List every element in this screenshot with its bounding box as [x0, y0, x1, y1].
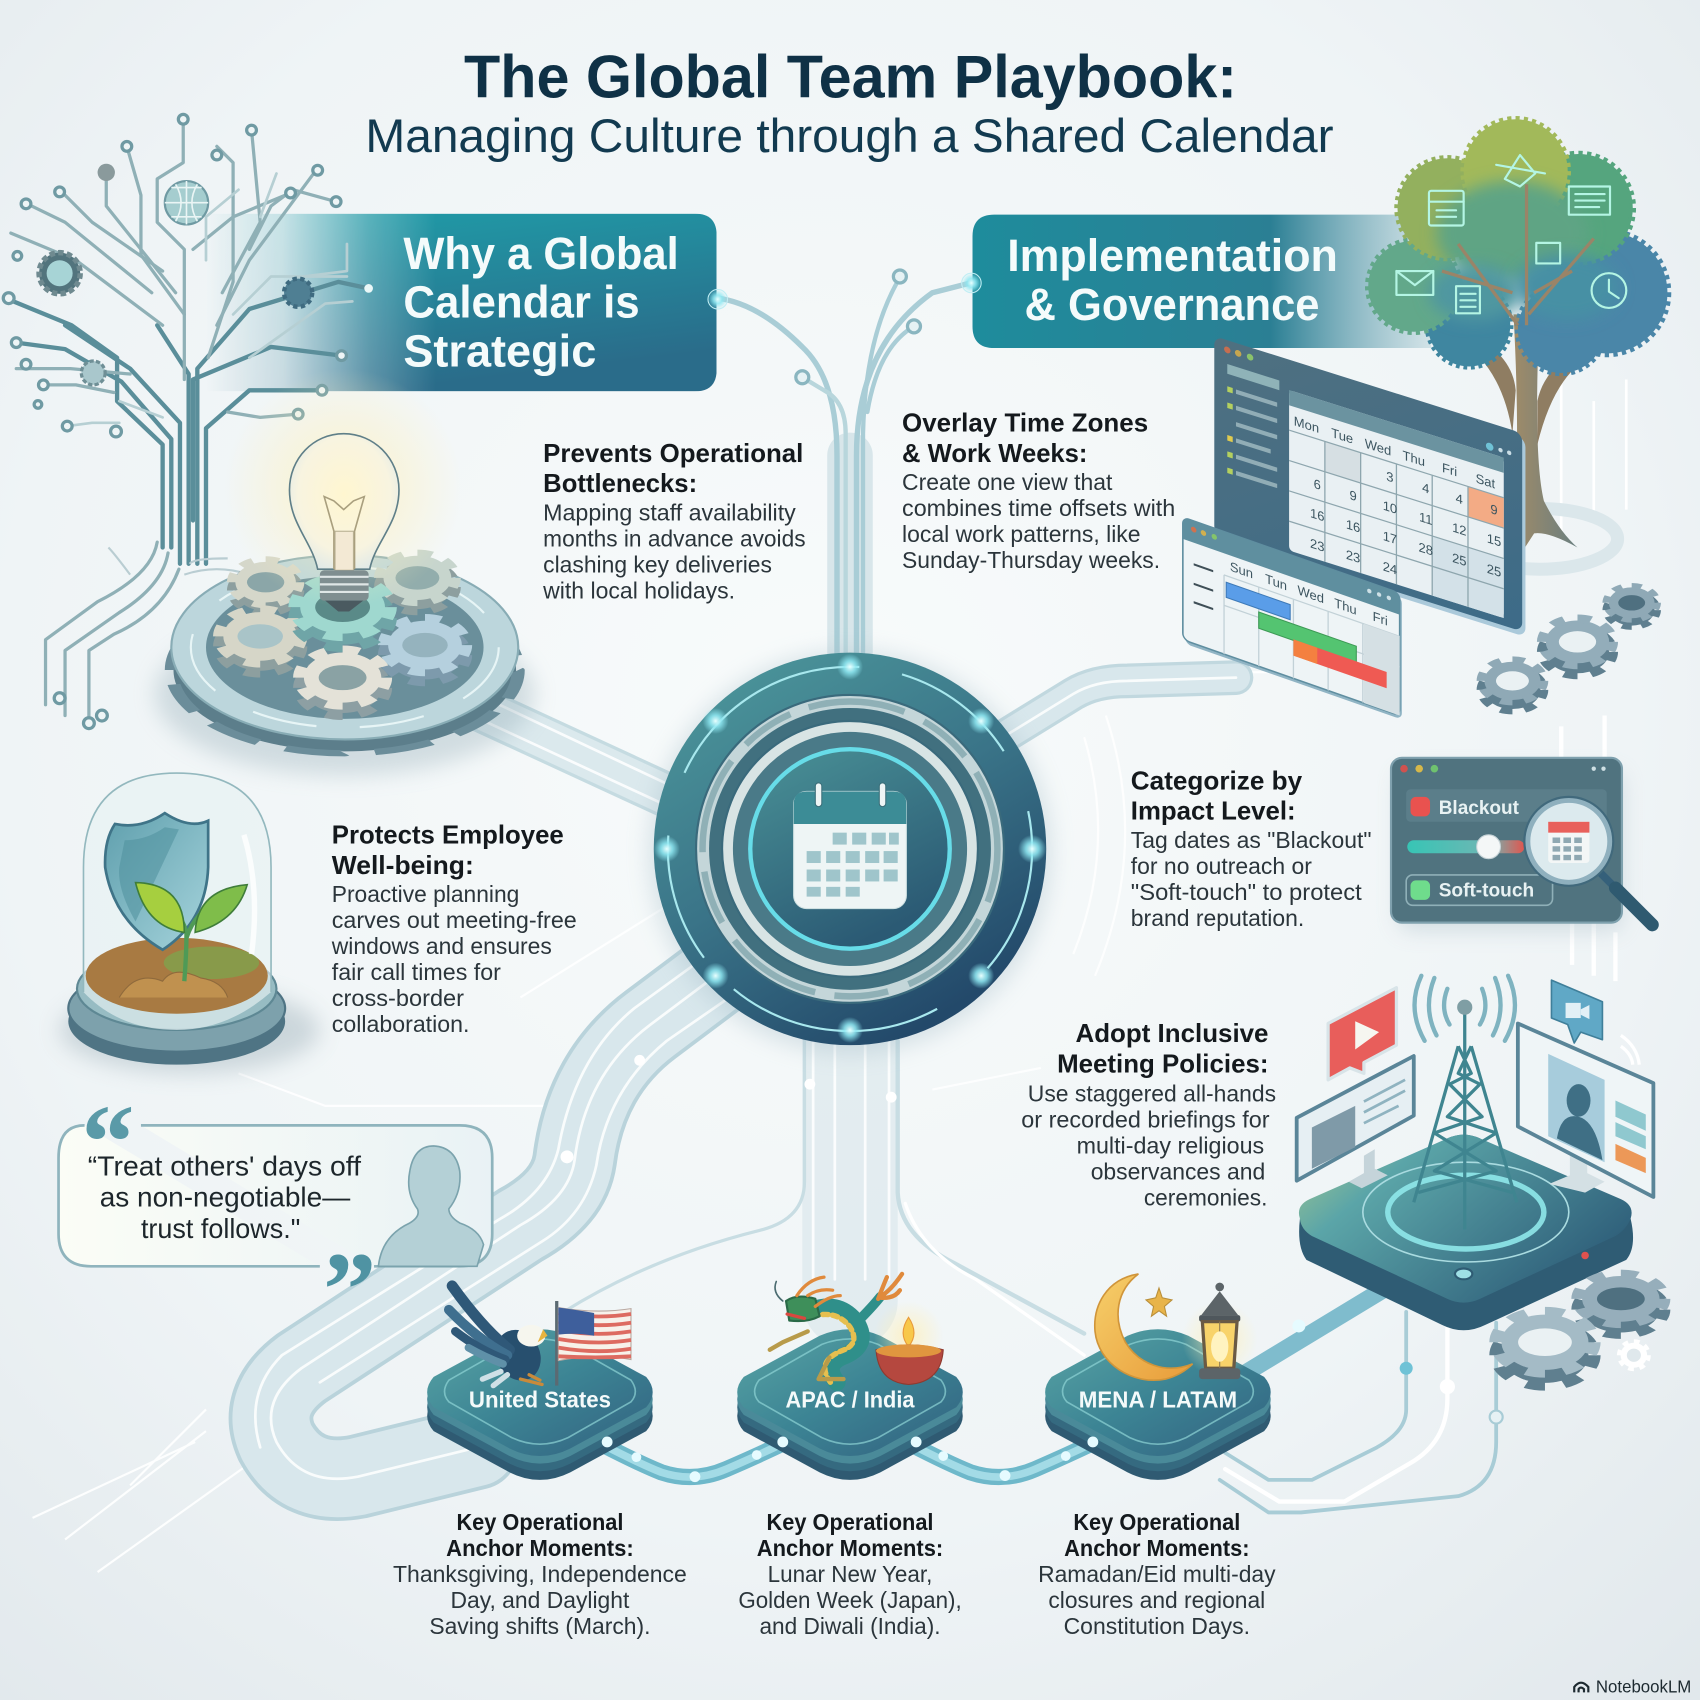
title: The Global Team Playbook: — [464, 43, 1237, 111]
icon: three gears by calendar — [1482, 586, 1657, 711]
region connector: United States to APAC — [602, 1442, 786, 1477]
icon: diya lamp — [874, 1301, 943, 1385]
text: overlay time zones: & Work Weeks: — [902, 438, 1087, 468]
region tile: United States: United States — [469, 1386, 611, 1412]
text: overlay time zones: Overlay Time Zones — [902, 408, 1148, 438]
notebooklm mark: NotebookLM — [1596, 1676, 1691, 1696]
icon: gear platform — [155, 554, 535, 775]
callout: quote: “ — [81, 1082, 134, 1200]
panel: why a global calendar is strategic: Strategic — [403, 325, 596, 376]
text: MENA anchor moments — [1038, 1509, 1276, 1639]
text: overlay time zones: combines time offsets with — [902, 495, 1175, 521]
text: overlay time zones: Create one view that — [902, 469, 1113, 495]
connector nodes — [602, 1319, 1305, 1482]
icon: crescent moon and star — [1095, 1274, 1193, 1380]
icon: calendar window with month grid: Thu — [1403, 448, 1425, 469]
icon: calendar window with month grid: 23 — [1346, 547, 1360, 566]
text: adopt inclusive meeting policies: or recorded briefings for — [1021, 1107, 1270, 1133]
panel: implementation and governance: Implementation — [1007, 230, 1338, 281]
text: prevents operational bottlenecks — [542, 438, 806, 603]
icon: American flag — [555, 1301, 631, 1386]
text: APAC anchor moments: and Diwali (India). — [759, 1613, 941, 1639]
text: categorize by impact level: Categorize by — [1131, 765, 1303, 795]
connector lines between right-side panels — [1561, 379, 1626, 981]
icon: calendar window with month grid: 11 — [1419, 509, 1432, 528]
icon: calendar window with month grid: Wed — [1365, 436, 1391, 459]
icon: circuit tree — [3, 114, 373, 564]
icon: light bulb — [224, 369, 463, 611]
text: adopt inclusive meeting policies: ceremonies. — [1144, 1185, 1267, 1211]
text: adopt inclusive meeting policies — [1021, 1018, 1276, 1211]
text: protects employee well-being: Well-being: — [332, 850, 474, 880]
text: protects employee well-being — [331, 819, 577, 1037]
text: adopt inclusive meeting policies: Use staggered all-hands — [1028, 1081, 1276, 1107]
callout: quote: as non-negotiable— — [100, 1181, 351, 1213]
text: US anchor moments — [393, 1509, 687, 1639]
text: adopt inclusive meeting policies: Meeting Policies: — [1057, 1048, 1268, 1078]
panel connector node: why — [708, 289, 727, 309]
icon: calendar window with month grid: 12 — [1452, 520, 1467, 539]
text: prevents operational bottlenecks: clashing key deliveries — [543, 551, 772, 577]
icon: calendar window with month grid: 10 — [1383, 498, 1397, 517]
icon: calendar window with month grid: 16 — [1310, 505, 1325, 524]
road: hub up to the two header panels — [718, 270, 970, 661]
text: categorize by impact level: brand reputation. — [1131, 905, 1304, 931]
text: protects employee well-being: carves out meeting-free — [332, 907, 577, 933]
text: US anchor moments: Thanksgiving, Independence — [393, 1561, 687, 1587]
panel: impact level tags with magnifier: Blackout — [1439, 797, 1519, 819]
icon: calendar window with month grid: 25 — [1487, 561, 1501, 580]
text: categorize by impact level: Tag dates as "Blackout" — [1131, 827, 1371, 853]
icon: scheduling window with colour bars: Thu — [1334, 595, 1357, 618]
icon: calendar window with month grid: 6 — [1314, 476, 1321, 493]
road: hub to gears — [477, 699, 694, 813]
icon: calendar window with month grid: Sat — [1476, 471, 1495, 492]
title — [365, 43, 1334, 163]
text: APAC anchor moments — [738, 1509, 962, 1639]
region tile: MENA / LATAM: MENA / LATAM — [1079, 1386, 1237, 1412]
text: categorize by impact level: for no outreach or — [1131, 853, 1312, 879]
panel: impact level tags with magnifier: Soft-touch — [1439, 880, 1534, 902]
decorative background circuit lines — [33, 672, 1377, 1572]
text: prevents operational bottlenecks: months in advance avoids — [543, 525, 806, 551]
panel: why a global calendar is strategic — [206, 214, 717, 391]
icon: calendar window with month grid: Fri — [1442, 460, 1457, 479]
icon: tree roots — [46, 542, 249, 729]
text: overlay time zones — [902, 408, 1175, 573]
icon: calendar window with month grid — [1214, 336, 1525, 637]
text: protects employee well-being: collaboration. — [332, 1011, 469, 1037]
road: hub down to APAC with branches — [564, 1030, 1084, 1355]
region connector: MENA to server — [1203, 1290, 1382, 1399]
text: protects employee well-being: windows and ensures — [331, 933, 552, 959]
road: hub down-left to United States — [255, 965, 737, 1479]
text: adopt inclusive meeting policies: observances and — [1091, 1159, 1265, 1185]
text: MENA anchor moments: Ramadan/Eid multi-day — [1038, 1561, 1276, 1587]
text: APAC anchor moments: Lunar New Year, — [768, 1561, 932, 1587]
panel: why a global calendar is strategic: Why a Global — [403, 228, 679, 279]
icon: scheduling window with colour bars: Wed — [1298, 583, 1324, 606]
text: categorize by impact level: "Soft-touch" to protect — [1131, 879, 1362, 905]
text: prevents operational bottlenecks: with local holidays. — [542, 577, 735, 603]
region tile: APAC / India — [737, 1329, 963, 1480]
icon: calendar window with month grid: 9 — [1349, 487, 1357, 504]
text: APAC anchor moments: Key Operational — [767, 1509, 933, 1535]
icon: scheduling window with colour bars — [1183, 517, 1402, 720]
text: US anchor moments: Day, and Daylight — [450, 1587, 630, 1613]
region tile: United States — [427, 1329, 653, 1480]
panel: impact level tags with magnifier — [1391, 758, 1652, 930]
callout: quote: “Treat others' days off — [88, 1149, 361, 1181]
icon: seedling and shield in glass dome — [60, 773, 320, 1073]
text: overlay time zones: Sunday-Thursday weeks. — [902, 547, 1160, 573]
icon: dragon — [770, 1274, 902, 1382]
road: hub to calendar windows — [1003, 678, 1236, 737]
text: protects employee well-being: cross-border — [332, 985, 464, 1011]
icon: tree with app icons — [1368, 119, 1667, 569]
icon: gears by server — [1498, 1274, 1663, 1385]
icon: calendar window with month grid: 23 — [1310, 536, 1325, 555]
text: prevents operational bottlenecks: Bottlenecks: — [543, 468, 697, 498]
icon: calendar window with month grid: 15 — [1487, 531, 1501, 550]
icon: lantern — [1182, 1283, 1258, 1379]
icon: eagle — [449, 1286, 549, 1388]
icon: calendar window with month grid: 16 — [1346, 517, 1360, 536]
icon: broadcast platform with tower and monitors — [1297, 976, 1653, 1330]
callout: quote: trust follows." — [141, 1212, 300, 1244]
icon: scheduling window with colour bars: Sun — [1230, 559, 1253, 581]
text: categorize by impact level — [1131, 765, 1371, 931]
icon: calendar window with month grid: 3 — [1386, 469, 1394, 485]
text: APAC anchor moments: Anchor Moments: — [757, 1535, 943, 1561]
text: protects employee well-being: Protects Employee — [332, 819, 564, 849]
icon: calendar window with month grid: 4 — [1456, 490, 1464, 508]
text: protects employee well-being: fair call times for — [332, 959, 501, 985]
panel: why a global calendar is strategic: Calendar is — [403, 277, 640, 328]
text: prevents operational bottlenecks: Prevents Operational — [543, 438, 803, 468]
text: overlay time zones: local work patterns, like — [902, 521, 1141, 547]
text: protects employee well-being: Proactive planning — [332, 881, 519, 907]
icon: calendar window with month grid: 9 — [1490, 501, 1498, 518]
text: MENA anchor moments: Anchor Moments: — [1064, 1535, 1250, 1561]
text: US anchor moments: Saving shifts (March). — [429, 1613, 651, 1639]
icon: calendar window with month grid: 28 — [1418, 539, 1433, 559]
icon: calendar window with month grid: 24 — [1383, 558, 1398, 578]
icon: calendar window with month grid: Tue — [1331, 425, 1353, 447]
text: categorize by impact level: Impact Level: — [1131, 796, 1296, 826]
text: MENA anchor moments: Key Operational — [1073, 1509, 1240, 1535]
title: Managing Culture through a Shared Calendar — [365, 110, 1334, 163]
text: APAC anchor moments: Golden Week (Japan), — [738, 1587, 962, 1613]
icon: calendar window with month grid: 25 — [1452, 550, 1467, 569]
callout: quote — [59, 1082, 492, 1348]
text: prevents operational bottlenecks: Mapping staff availability — [543, 499, 796, 525]
icon: calendar window with month grid: 17 — [1383, 528, 1397, 547]
text: US anchor moments: Anchor Moments: — [446, 1535, 634, 1561]
connector lines below the server — [1220, 1312, 1503, 1512]
panel: implementation and governance — [973, 215, 1431, 348]
text: MENA anchor moments: closures and regional — [1048, 1587, 1265, 1613]
region tile: APAC / India: APAC / India — [785, 1386, 915, 1412]
text: adopt inclusive meeting policies: multi-day religious — [1077, 1133, 1264, 1159]
icon: calendar window with month grid: Mon — [1294, 413, 1319, 436]
region tile: MENA / LATAM — [1045, 1329, 1271, 1480]
central hub with calendar — [648, 651, 1052, 1054]
region connector: APAC to MENA — [911, 1442, 1095, 1477]
icon: scheduling window with colour bars: Fri — [1373, 609, 1388, 629]
icon: calendar window with month grid: 4 — [1422, 480, 1430, 497]
callout: quote: ” — [323, 1230, 376, 1348]
text: US anchor moments: Key Operational — [456, 1509, 623, 1535]
icon: scheduling window with colour bars: Tun — [1265, 571, 1287, 593]
panel: implementation and governance: & Governance — [1025, 279, 1319, 330]
text: MENA anchor moments: Constitution Days. — [1064, 1613, 1250, 1639]
text: adopt inclusive meeting policies: Adopt Inclusive — [1076, 1018, 1268, 1048]
panel connector node: implementation — [962, 273, 981, 293]
